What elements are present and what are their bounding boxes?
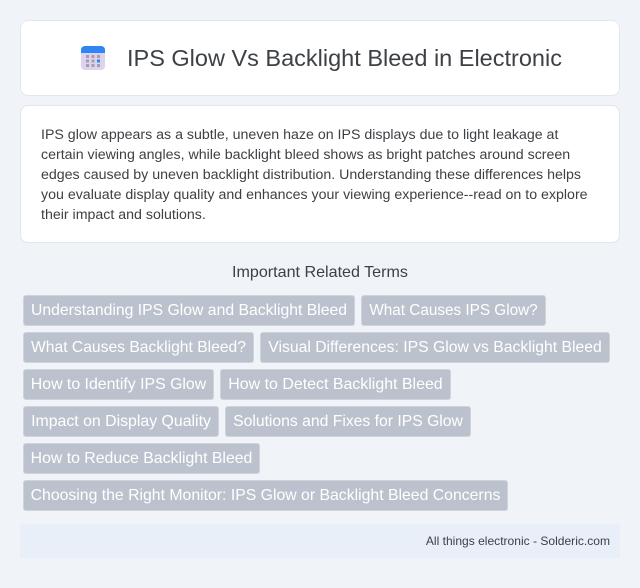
tag: Solutions and Fixes for IPS Glow	[233, 413, 463, 430]
tag	[225, 406, 471, 437]
intro text: edges caused by uneven backlight distribution. Understanding these differences helps	[41, 167, 581, 183]
tag: Impact on Display Quality	[31, 413, 211, 430]
tag: Visual Differences: IPS Glow vs Backlight Bleed	[268, 339, 602, 356]
intro text: their impact and solutions.	[41, 207, 206, 223]
footer text: All things electronic - Solderic.com	[426, 534, 610, 548]
tag	[23, 369, 214, 400]
tag	[23, 443, 260, 474]
intro text	[41, 127, 588, 223]
tag	[23, 406, 219, 437]
tag: How to Detect Backlight Bleed	[228, 376, 443, 393]
tag	[260, 332, 610, 363]
intro text: IPS glow appears as a subtle, uneven haze on IPS displays due to light leakage at	[41, 127, 558, 143]
intro panel	[20, 105, 620, 243]
tag	[361, 295, 546, 326]
title: IPS Glow Vs Backlight Bleed in Electronic	[127, 45, 562, 71]
icon: calendar	[81, 46, 105, 70]
tag: What Causes IPS Glow?	[369, 302, 538, 319]
heading: related terms: Important Related Terms	[232, 263, 408, 281]
tag: How to Identify IPS Glow	[31, 376, 206, 393]
tag: What Causes Backlight Bleed?	[31, 339, 246, 356]
tag	[23, 295, 355, 326]
tag	[23, 332, 254, 363]
term tags	[23, 295, 610, 511]
intro text: you evaluate display quality and enhances your viewing experience--read on to explore	[41, 187, 588, 203]
footer bar	[20, 524, 620, 558]
tag: Choosing the Right Monitor: IPS Glow or Backlight Bleed Concerns	[31, 487, 500, 504]
header panel	[20, 20, 620, 96]
tag: Understanding IPS Glow and Backlight Bleed	[31, 302, 347, 319]
intro text: certain viewing angles, while backlight bleed shows as bright patches around screen	[41, 147, 570, 163]
tag	[220, 369, 451, 400]
tag	[23, 480, 508, 511]
tag: How to Reduce Backlight Bleed	[31, 450, 252, 467]
